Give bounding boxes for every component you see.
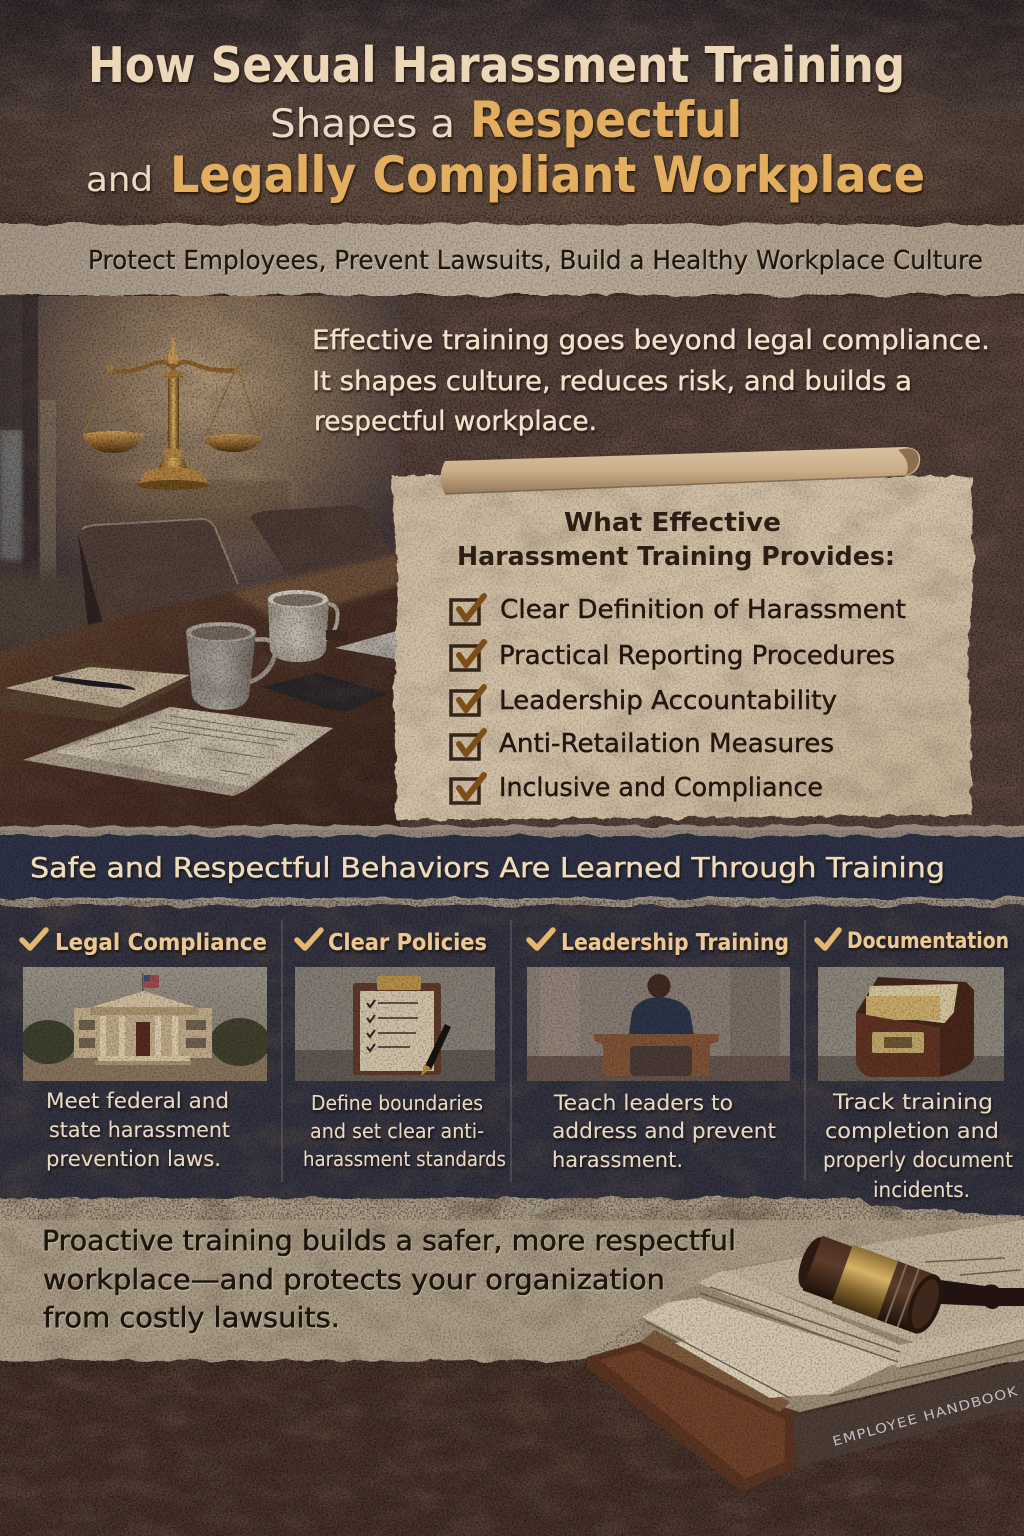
column: legal compliance (20, 930, 270, 1171)
gavel (791, 1230, 1024, 1338)
body text (552, 1091, 776, 1172)
checklist: Anti-Retailation Measures (499, 729, 834, 759)
document (23, 707, 333, 796)
heading band: safe and respectful behaviors: Safe and Respectful Behaviors Are Learned Through Training (30, 851, 945, 884)
front mug (186, 622, 275, 710)
body text: Track training (832, 1090, 993, 1114)
image: file drawer (818, 967, 1004, 1081)
table (0, 553, 400, 826)
body text: harassment. (552, 1148, 683, 1172)
body text: Define boundaries (311, 1091, 483, 1115)
intro text: Effective training goes beyond legal compliance. (312, 325, 990, 356)
column: leadership training: Leadership Training (561, 930, 789, 956)
subtitle band (0, 215, 1024, 300)
body text: and set clear anti- (310, 1119, 484, 1143)
chairs (78, 505, 392, 625)
wallet (262, 673, 387, 712)
column: documentation (817, 929, 1013, 1202)
stacked papers (640, 1220, 1024, 1412)
column: legal compliance: Legal Compliance (55, 930, 267, 956)
employee handbook (587, 1342, 1024, 1492)
column: leadership training (527, 930, 790, 1172)
body text: harassment standards (303, 1147, 506, 1171)
body text: Meet federal and (46, 1089, 229, 1113)
panel: closing statement: Proactive training builds a safer, more respectful (42, 1224, 736, 1257)
body text (46, 1089, 230, 1171)
image: clipboard (295, 967, 495, 1081)
icon: scales of justice (83, 336, 263, 490)
small book (326, 630, 348, 640)
column: clear policies (295, 930, 506, 1171)
checklist (451, 595, 906, 803)
body text: properly document (823, 1148, 1013, 1172)
body text (823, 1090, 1013, 1202)
intro text: It shapes culture, reduces risk, and builds a (312, 366, 912, 397)
checklist: Leadership Accountability (499, 686, 837, 716)
checklist: Clear Definition of Harassment (500, 595, 906, 625)
hero scene: conference table (0, 296, 400, 826)
intro text (312, 325, 990, 437)
panel heading (457, 508, 895, 572)
body text: incidents. (873, 1178, 970, 1202)
panel heading: Harassment Training Provides: (457, 542, 895, 572)
panel: four training pillars (0, 900, 1024, 1220)
body text: completion and (825, 1119, 999, 1143)
body text: Teach leaders to (553, 1091, 733, 1115)
title: Shapes a (270, 102, 455, 147)
title: and (86, 160, 153, 200)
panel heading: What Effective (564, 508, 781, 538)
illustration: handbook and gavel (580, 1215, 1024, 1495)
body text: prevention laws. (46, 1147, 221, 1171)
panel: closing statement (0, 1185, 1024, 1370)
white paper far (335, 630, 400, 660)
body text: state harassment (49, 1118, 230, 1142)
column: clear policies: Clear Policies (328, 930, 487, 956)
notebook with pen (0, 661, 190, 722)
subtitle band: Protect Employees, Prevent Lawsuits, Build a Healthy Workplace Culture (88, 246, 983, 276)
handbook spine label: EMPLOYEE HANDBOOK (831, 1384, 1020, 1450)
back mug (268, 590, 338, 662)
panel: closing statement: workplace—and protects your organization (43, 1263, 665, 1296)
title: How Sexual Harassment Training (88, 37, 905, 94)
title: Respectful (470, 91, 742, 149)
checklist: Inclusive and Compliance (499, 773, 823, 803)
heading band: safe and respectful behaviors (0, 830, 1024, 906)
panel: what effective training provides (385, 447, 980, 825)
image: courthouse (20, 967, 270, 1081)
title: Legally Compliant Workplace (170, 146, 925, 204)
strips between sections (0, 826, 1024, 910)
intro text: respectful workplace. (314, 406, 597, 437)
panel: closing statement: from costly lawsuits. (43, 1301, 340, 1334)
body text (303, 1091, 506, 1171)
checklist: Practical Reporting Procedures (499, 641, 895, 671)
body text: address and prevent (552, 1119, 776, 1143)
title (86, 37, 925, 204)
image: leader at desk (527, 967, 790, 1081)
scroll top (440, 447, 920, 494)
